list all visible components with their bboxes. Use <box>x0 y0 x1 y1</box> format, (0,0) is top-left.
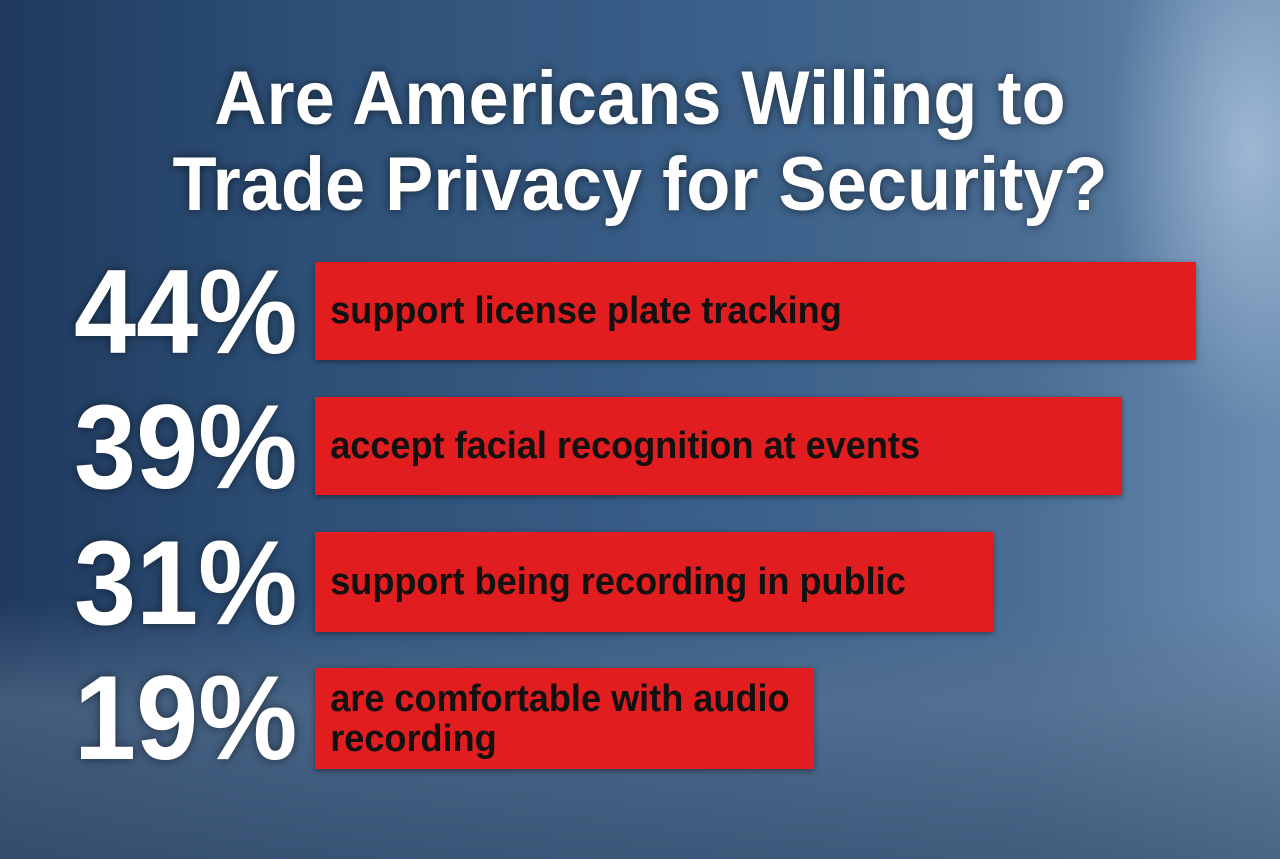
title: Trade Privacy for Security? <box>172 142 1108 227</box>
stat: 19%: 19% <box>74 651 297 785</box>
stat: 31%: 31% <box>74 516 297 650</box>
bar: audio recording: recording <box>330 718 497 760</box>
stat: 39%: 39% <box>74 380 297 514</box>
bar: recording in public <box>315 532 993 632</box>
title: Are Americans Willing to <box>214 56 1066 141</box>
bar: facial recognition <box>315 397 1122 495</box>
bar: audio recording: are comfortable with audio <box>330 678 790 720</box>
stat: 44%: 44% <box>74 245 297 379</box>
bar: facial recognition: accept facial recognition at events <box>330 425 920 467</box>
bar: license plate tracking: support license plate tracking <box>330 290 842 332</box>
bar: recording in public: support being recording in public <box>330 561 906 603</box>
bar: license plate tracking <box>315 262 1196 360</box>
bar: audio recording <box>315 668 814 769</box>
title <box>169 56 1109 232</box>
